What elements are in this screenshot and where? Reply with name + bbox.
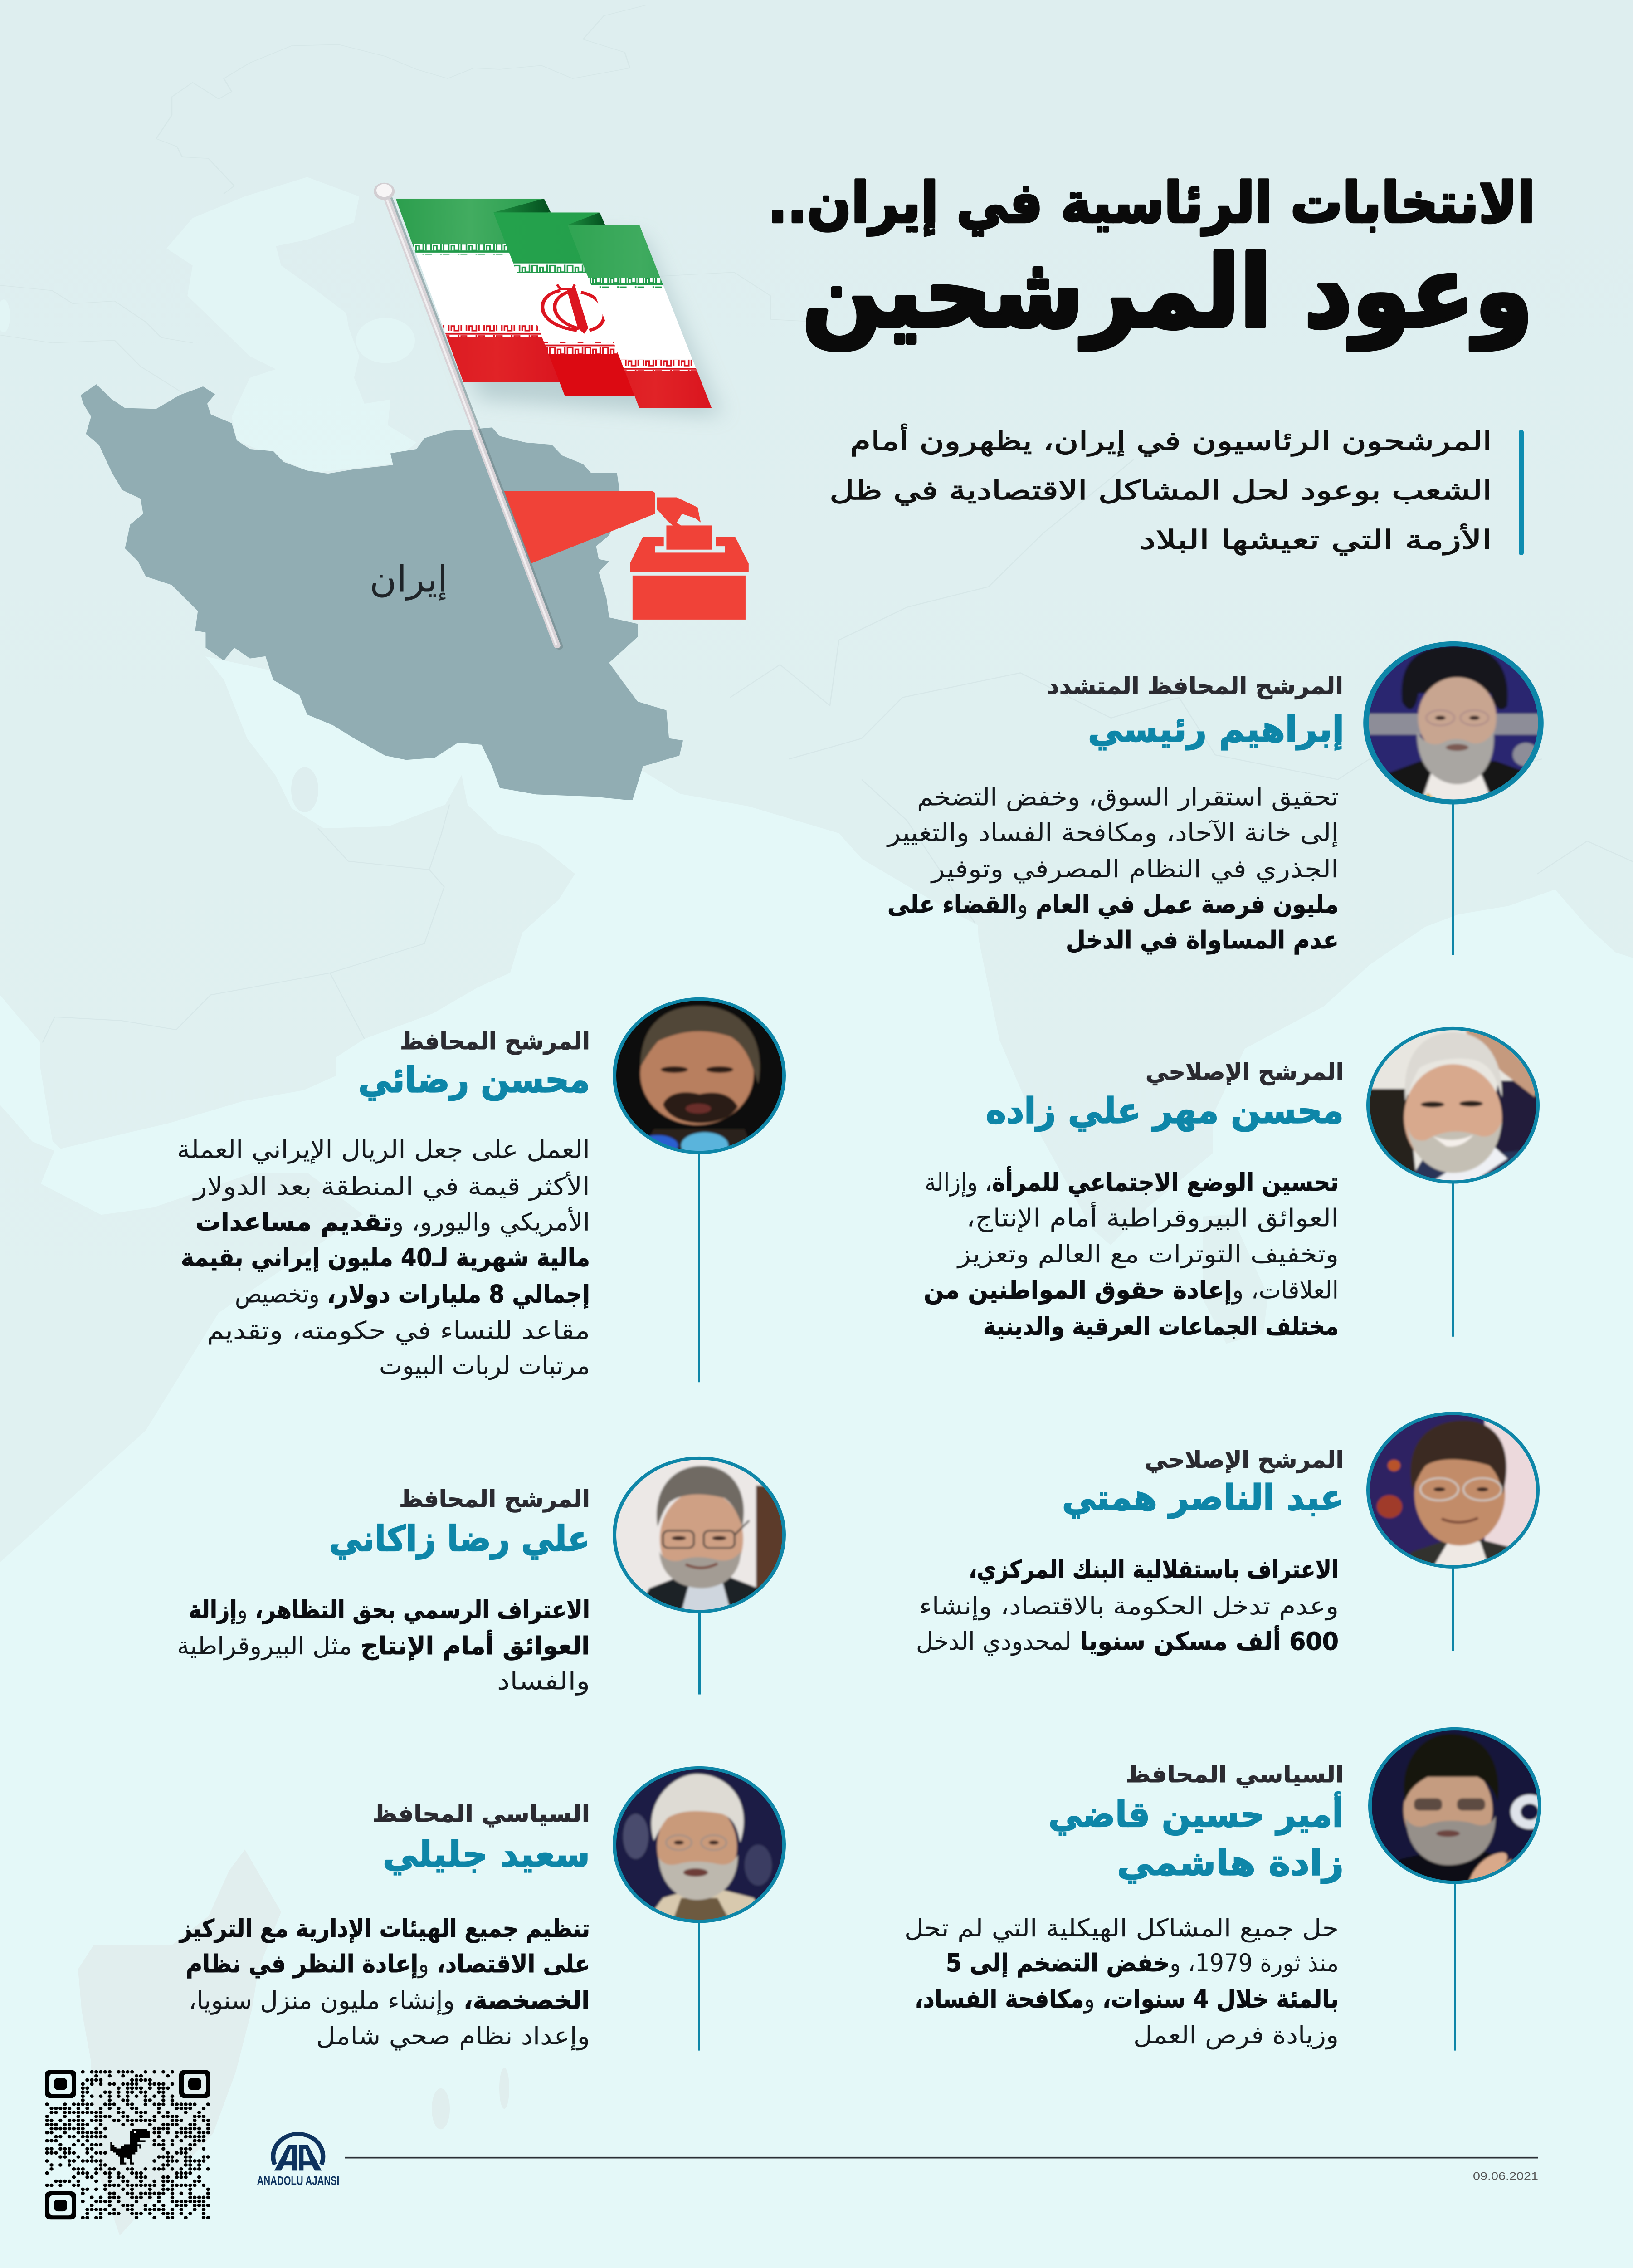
portrait: Ghazizadeh — [1369, 1728, 1549, 1883]
promises — [924, 1166, 1339, 1341]
logo: Anadolu Agency — [257, 2134, 339, 2188]
promises: العوائق أمام الإنتاج مثل البيروقراطية — [177, 1630, 590, 1661]
portrait: Hemmati — [1367, 1412, 1539, 1568]
date: 09.06.2021 — [1473, 2170, 1538, 2182]
panel: Saeed Jalili — [178, 1767, 785, 2051]
promises: على الاقتصاد، وإعادة النظر في نظام — [186, 1950, 590, 1979]
candidate tag: المرشح المحافظ المتشدد — [1047, 672, 1343, 699]
candidate tag: المرشح المحافظ — [399, 1486, 590, 1513]
candidate tag: السياسي المحافظ — [372, 1800, 590, 1827]
promises — [177, 1135, 590, 1380]
candidate name: محسن مهر علي زاده — [986, 1090, 1344, 1132]
line — [698, 1153, 700, 1382]
map label: Iran: إيران — [370, 558, 448, 601]
promises: وزيادة فرص العمل — [1133, 2021, 1339, 2050]
candidate name — [1048, 1791, 1344, 1883]
intro text: الشعب بوعود لحل المشاكل الاقتصادية في ظل — [829, 475, 1492, 506]
promises: العمل على جعل الريال الإيراني العملة — [177, 1135, 590, 1164]
promises: إلى خانة الآحاد، ومكافحة الفساد والتغيير — [886, 819, 1339, 847]
line — [698, 1612, 701, 1695]
portrait: Rezaei — [613, 998, 785, 1158]
promises: الاعتراف الرسمي بحق التظاهر، وإزالة — [189, 1596, 590, 1625]
intro text: المرشحون الرئاسيون في إيران، يظهرون أمام — [850, 424, 1492, 457]
panel: Mohsen Mehr Alizadeh — [924, 1027, 1539, 1341]
promises: وتخفيف التوترات مع العالم وتعزيز — [956, 1240, 1339, 1268]
panel: Alireza Zakani — [177, 1457, 788, 1696]
panel: Abdolnaser Hemmati — [916, 1412, 1539, 1656]
promises: بالمئة خلال 4 سنوات، ومكافحة الفساد، — [915, 1985, 1339, 2014]
promises: مختلف الجماعات العرقية والدينية — [983, 1312, 1339, 1341]
promises: تنظيم جميع الهيئات الإدارية مع التركيز — [178, 1915, 590, 1943]
title — [768, 170, 1535, 351]
promises: الأمريكي واليورو، وتقديم مساعدات — [195, 1207, 590, 1237]
QR code — [45, 2070, 210, 2219]
footer rule — [345, 2157, 1538, 2159]
promises: والفساد — [497, 1667, 590, 1696]
logo: Anadolu Agency: ANADOLU AJANSI — [257, 2174, 339, 2188]
promises: الاعتراف باستقلالية البنك المركزي، — [969, 1555, 1339, 1584]
line — [698, 1921, 700, 2051]
promises — [178, 1915, 590, 2051]
promises: مقاعد للنساء في حكومته، وتقديم — [207, 1316, 590, 1345]
map: Iran — [81, 384, 683, 800]
promises: تحقيق استقرار السوق، وخفض التضخم — [917, 783, 1339, 811]
candidate name: إبراهيم رئيسي — [1088, 709, 1344, 750]
line — [1452, 1566, 1454, 1651]
candidate name: محسن رضائي — [358, 1060, 590, 1101]
promises: 600 ألف مسكن سنويا لمحدودي الدخل — [916, 1625, 1339, 1656]
icon: hand and ballot box — [504, 491, 749, 620]
promises: مرتبات لربات البيوت — [379, 1352, 590, 1380]
title: وعود المرشحين — [802, 235, 1533, 351]
intro text — [829, 424, 1524, 555]
panel: Ebrahim Raisi — [886, 643, 1542, 955]
promises: مالية شهرية لـ40 مليون إيراني بقيمة — [181, 1244, 590, 1272]
promises: حل جميع المشاكل الهيكلية التي لم تحل — [904, 1914, 1339, 1942]
line — [1452, 1183, 1454, 1337]
candidate name: زادة هاشمي — [1117, 1843, 1344, 1883]
portrait: Mehr Alizadeh — [1367, 1027, 1539, 1183]
candidate tag: السياسي المحافظ — [1126, 1761, 1344, 1788]
candidate name: سعيد جليلي — [383, 1834, 590, 1875]
panel: Mohsen Rezaei — [177, 998, 785, 1382]
promises — [904, 1914, 1339, 2050]
promises: الخصخصة، وإنشاء مليون منزل سنويا، — [189, 1986, 590, 2015]
intro text: الأزمة التي تعيشها البلاد — [1140, 524, 1492, 555]
candidate tag: المرشح المحافظ — [400, 1027, 590, 1055]
flag: Iran — [390, 196, 721, 417]
candidate tag: المرشح الإصلاحي — [1145, 1446, 1344, 1473]
flag pole — [374, 183, 559, 646]
portrait: Jalili — [613, 1767, 785, 1922]
promises: الأكثر قيمة في المنطقة بعد الدولار — [192, 1171, 590, 1201]
candidate tag: المرشح الإصلاحي — [1146, 1058, 1344, 1085]
promises — [916, 1555, 1339, 1656]
promises: عدم المساواة في الدخل — [1066, 926, 1339, 955]
promises — [886, 783, 1339, 955]
promises: مليون فرصة عمل في العام والقضاء على — [887, 890, 1339, 919]
promises: وعدم تدخل الحكومة بالاقتصاد، وإنشاء — [919, 1592, 1339, 1621]
promises — [177, 1596, 590, 1696]
line — [1452, 802, 1454, 955]
candidate name: أمير حسين قاضي — [1048, 1791, 1344, 1835]
candidate name: عبد الناصر همتي — [1062, 1477, 1344, 1518]
portrait: Zakani — [613, 1457, 788, 1613]
candidate name: علي رضا زاكاني — [329, 1519, 590, 1559]
promises: إجمالي 8 مليارات دولار، وتخصيص — [235, 1280, 590, 1309]
line — [1454, 1882, 1456, 2051]
promises: العلاقات، وإعادة حقوق المواطنين من — [924, 1276, 1339, 1305]
portrait: Raisi — [1365, 643, 1542, 803]
promises: منذ ثورة 1979، وخفض التضخم إلى 5 — [946, 1949, 1339, 1978]
promises: العوائق البيروقراطية أمام الإنتاج، — [966, 1202, 1339, 1233]
promises: تحسين الوضع الاجتماعي للمرأة، وإزالة — [925, 1166, 1339, 1197]
promises: وإعداد نظام صحي شامل — [316, 2022, 590, 2051]
panel: Amir Hossein Ghazizadeh Hashemi — [904, 1728, 1549, 2051]
promises: الجذري في النظام المصرفي وتوفير — [930, 855, 1339, 883]
